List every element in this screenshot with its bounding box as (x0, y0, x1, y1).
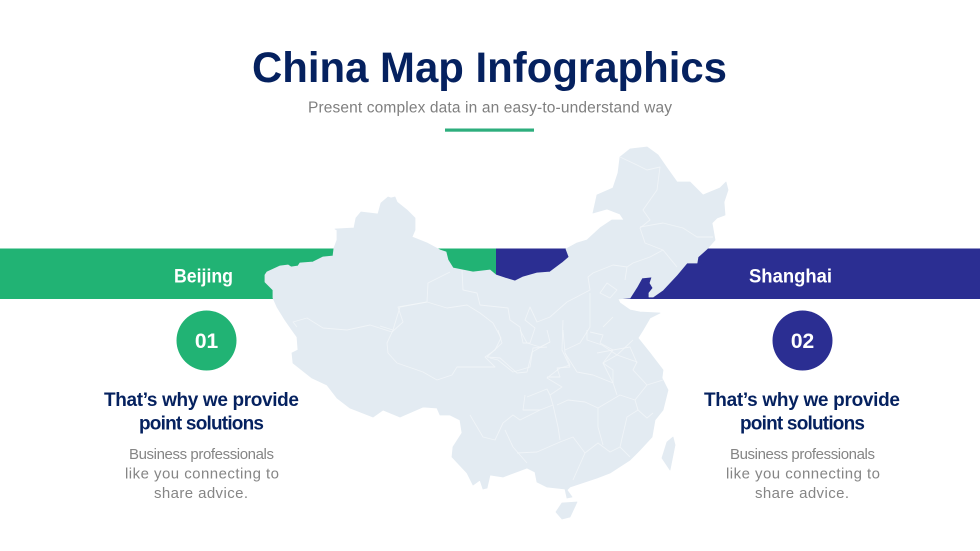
description: like you connecting to (726, 466, 880, 482)
label: Beijing: Beijing (174, 266, 233, 288)
heading: That’s why we provide (104, 390, 299, 411)
number badge 02: 02 (791, 330, 814, 353)
description: Business professionals (129, 446, 274, 463)
island: Hainan (556, 502, 577, 519)
number badge 02 (772, 310, 832, 370)
title: China Map Infographics (252, 44, 727, 92)
title underline (445, 128, 534, 132)
column: Shanghai (704, 310, 905, 502)
province borders (293, 157, 713, 480)
heading: That’s why we provide (704, 390, 900, 411)
map of China (265, 147, 728, 519)
column: Beijing (104, 310, 304, 502)
subtitle: Present complex data in an easy-to-understand way (308, 100, 672, 116)
island: Taiwan (662, 437, 675, 470)
number badge 01: 01 (195, 330, 218, 353)
description: Business professionals (730, 446, 875, 463)
description: share advice. (154, 485, 248, 502)
banner: Shanghai (496, 248, 980, 299)
mainland outline (265, 147, 728, 498)
heading: point solutions (139, 414, 264, 434)
banner: Beijing (0, 248, 496, 299)
label: Shanghai: Shanghai (749, 266, 832, 288)
number badge 01 (176, 310, 236, 370)
description: share advice. (755, 485, 849, 502)
heading: point solutions (740, 414, 865, 434)
description: like you connecting to (125, 466, 279, 482)
